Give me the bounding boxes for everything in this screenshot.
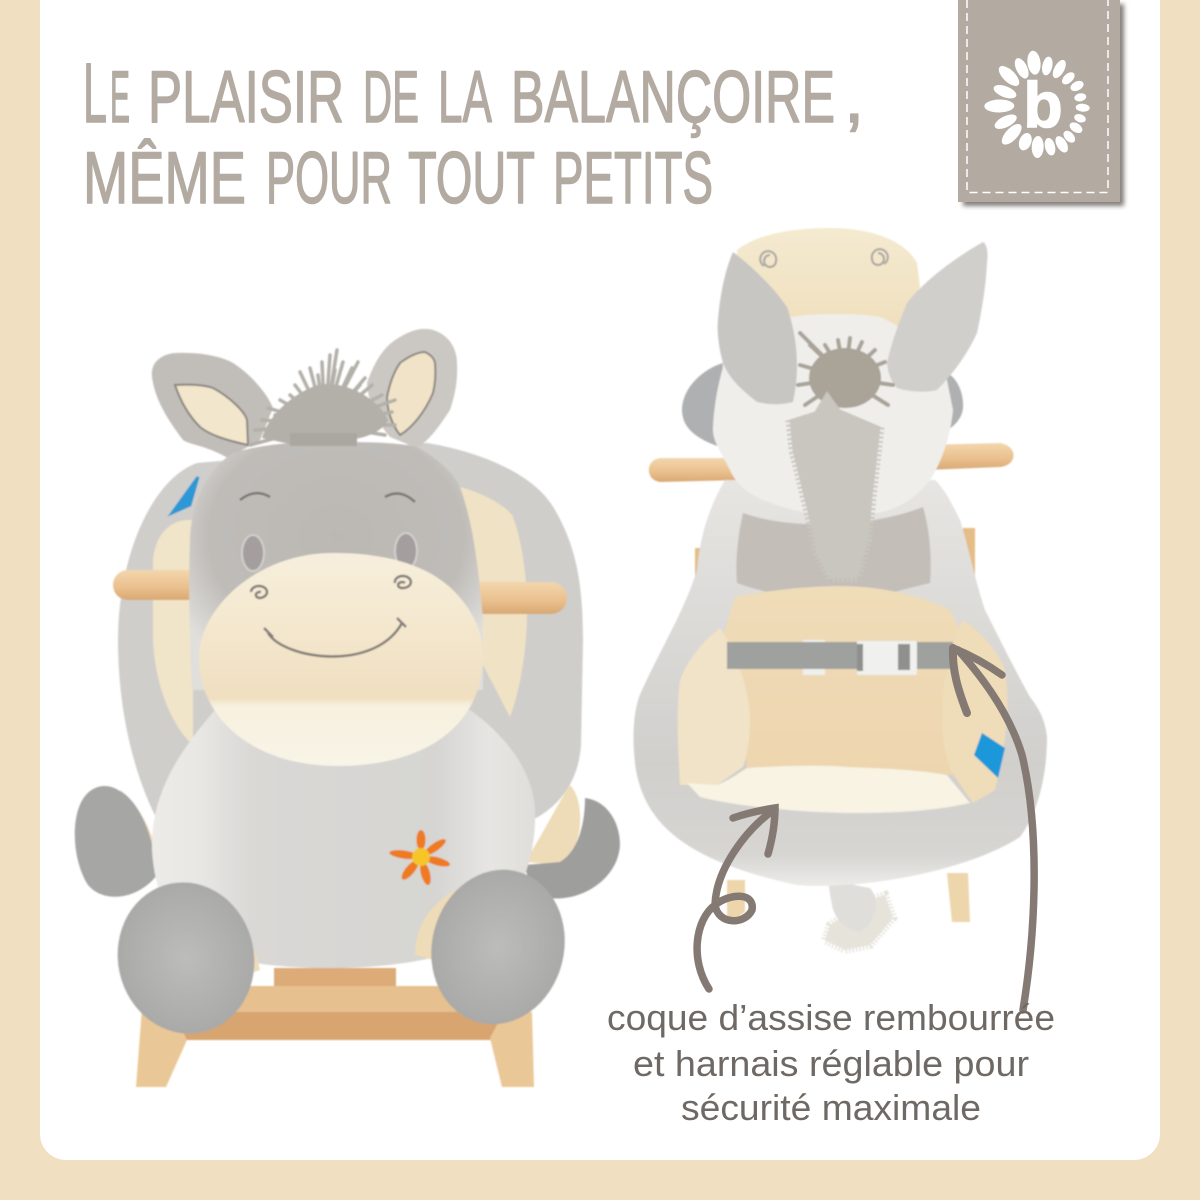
wooden handles [649, 443, 1014, 482]
title [83, 46, 864, 219]
icon: flower logo: b [1023, 69, 1063, 141]
title: PETITS [553, 138, 713, 219]
blue label [172, 477, 198, 513]
photo: rocking donkey front view [75, 329, 620, 1087]
side bumps [682, 363, 723, 447]
rear feet [120, 790, 160, 870]
caption text: sécurité maximale [681, 1087, 981, 1128]
wooden handles [113, 570, 213, 600]
right ear [887, 242, 988, 392]
back of head [713, 314, 953, 516]
tail [825, 863, 893, 950]
rear head panel [737, 228, 920, 330]
caption text: et harnais réglable pour [633, 1043, 1029, 1084]
seat cushion [687, 766, 970, 813]
muzzle [199, 553, 483, 766]
arrow: to seat [697, 808, 775, 989]
rocker base [136, 968, 534, 1087]
mane lower tuft [790, 392, 880, 578]
icon: embroidered orange flower [389, 830, 451, 886]
seat posts [695, 528, 975, 603]
beige seat back [722, 586, 965, 775]
title: BALANÇOIRE [511, 57, 835, 138]
grey neck band [736, 507, 931, 597]
title: DE [363, 57, 419, 138]
arrow: to harness [953, 648, 1034, 1010]
brand tag with logo [958, 0, 1124, 206]
title: E [110, 57, 130, 138]
left cushion [678, 628, 750, 785]
mane top tuft [798, 333, 893, 408]
front feet [104, 870, 268, 1046]
title: MÊME [83, 138, 246, 219]
caption text [607, 997, 1055, 1128]
leg stubs [190, 885, 260, 990]
head [189, 442, 483, 690]
title: PLAISIR [148, 57, 344, 138]
title: L [83, 46, 107, 140]
harness strap and buckle [727, 640, 953, 675]
title: , [844, 57, 864, 138]
back seat shell [118, 443, 583, 825]
photo: seat rear view [634, 228, 1047, 950]
blue label [974, 733, 1005, 778]
title: TOUT [408, 138, 535, 219]
icon: flower logo [984, 50, 1090, 158]
left ear [718, 252, 797, 404]
body [152, 710, 535, 968]
title: POUR [266, 138, 392, 219]
mane [250, 350, 395, 446]
eyes and brows [240, 493, 417, 571]
title: LA [438, 57, 492, 138]
right ear [367, 329, 457, 448]
grey seat shell [634, 480, 1047, 886]
smile and nostrils [251, 576, 411, 657]
left ear [152, 353, 273, 458]
right cushion [942, 620, 1008, 803]
caption text: coque d’assise rembourrée [607, 997, 1055, 1038]
